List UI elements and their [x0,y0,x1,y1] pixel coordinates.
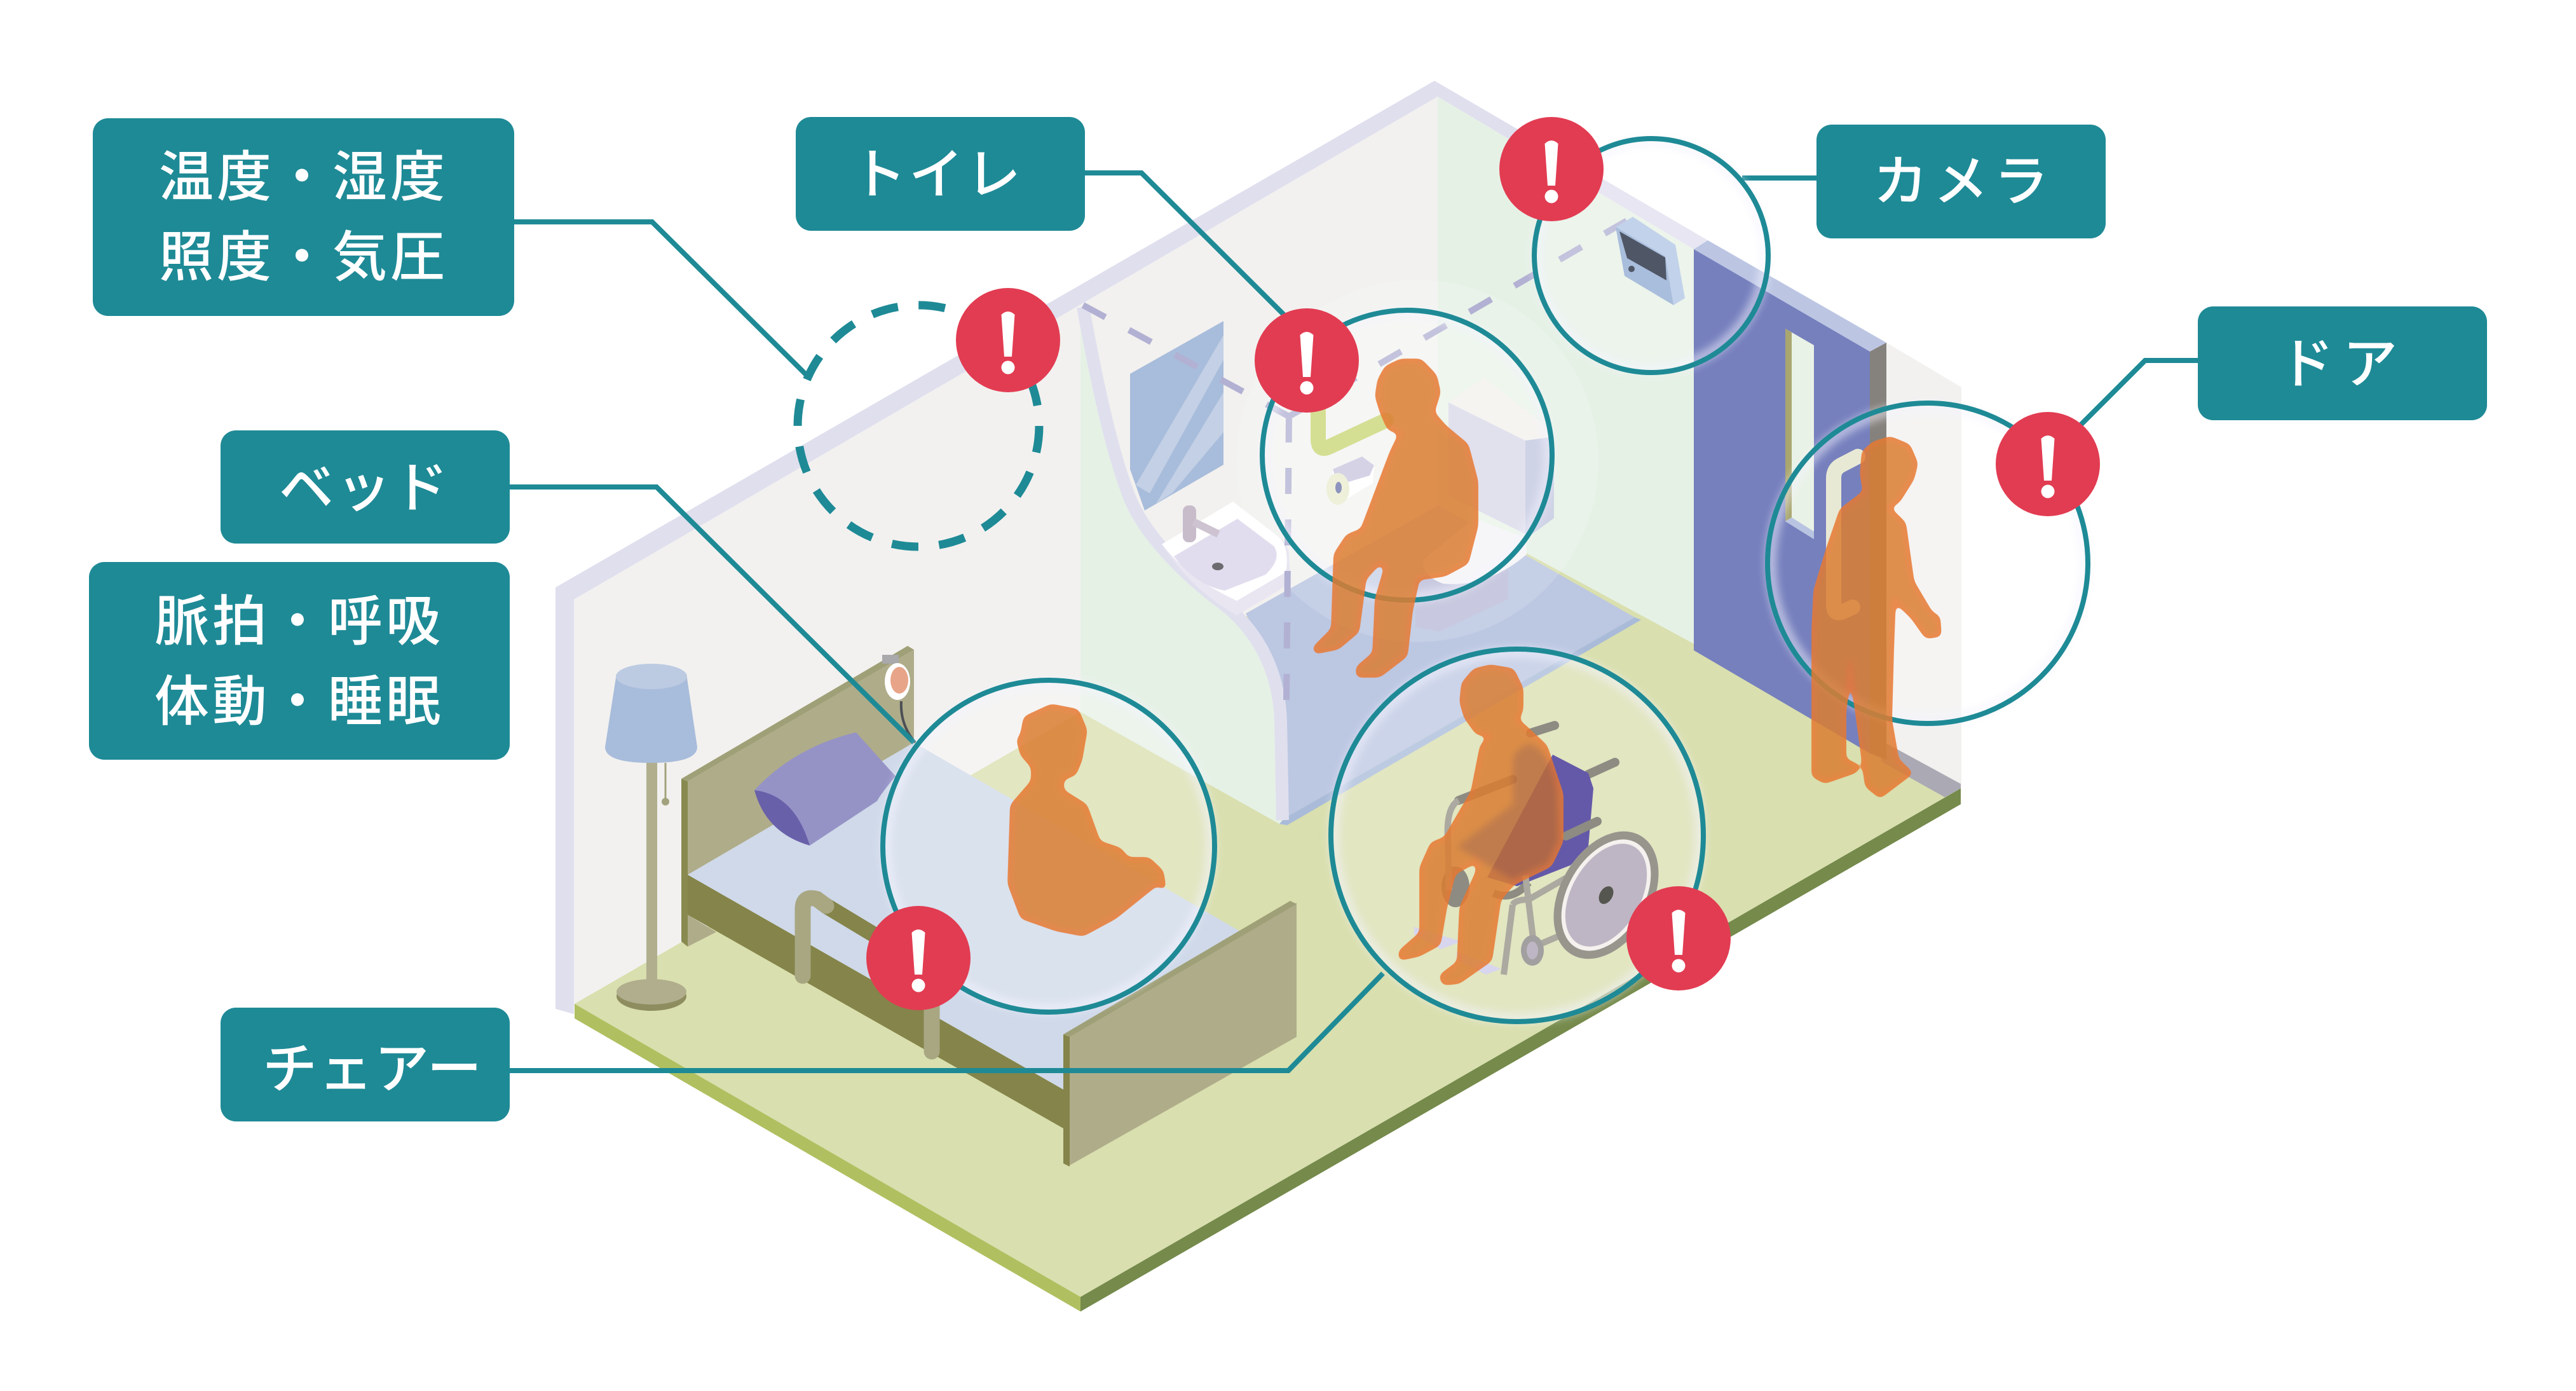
door [1694,240,1886,760]
alert icon: camera [1499,117,1604,221]
label: door: ドア [2279,334,2406,395]
label: chair: チェアー [262,1039,483,1100]
pillow [754,732,896,846]
bed [681,646,1297,1167]
sensor circle: wheelchair [1331,649,1703,1022]
room walls [555,81,1961,1014]
person on toilet [1314,360,1476,676]
sink [1162,502,1290,615]
person on bed [1009,706,1164,935]
label: pulse, breathing, movement, sleep: 脈拍・呼吸 [154,591,444,652]
sensor circle: toilet [1262,310,1552,600]
connector lines [510,173,2198,1071]
footboard [1063,901,1297,1167]
alert icon: chair [1626,886,1731,990]
sensor circle: camera [1534,139,1768,373]
person in wheelchair [1400,666,1562,983]
sensor circle: bed [883,680,1215,1012]
label: temperature, humidity, illuminance, pressure: 温度・湿度 [159,147,448,208]
alert icon: environment [956,288,1060,392]
label: bed: ベッド [279,458,451,519]
mirror [1130,321,1223,510]
person at door [1813,438,1940,797]
toilet [1415,378,1554,631]
label: camera: カメラ [1873,151,2054,212]
curved partition [1080,307,1283,824]
bed sensor [882,655,915,743]
circle lightening fills [883,139,2088,1022]
dashed sensor guide lines [1083,216,1635,702]
sensor circle: environment (dashed) [798,305,1039,547]
toilet paper holder [1326,456,1374,505]
alert icon: toilet [1255,308,1359,413]
label: camera [1816,125,2106,238]
camera device [1616,217,1685,305]
soft glow rims of sensor circles [886,142,2085,1018]
label: bed [221,430,510,544]
label: chair [221,1008,510,1121]
label: toilet [796,117,1085,231]
floor lamp [605,664,697,1011]
faint privacy circle around toilet [1236,280,1598,642]
label: toilet: トイレ [852,144,1023,205]
bathroom floor [1246,505,1641,825]
floor [575,505,1961,1312]
grab bar [1318,410,1386,448]
bed mattress [688,743,1241,1090]
label: temperature, humidity, illuminance, pressure [93,118,514,316]
sensor circle: door [1768,403,2088,723]
bed rail [803,898,932,1052]
wheelchair [1414,725,1680,978]
alert icon: door [1996,412,2100,516]
alert icon: bed [866,906,971,1010]
label: pulse, breathing, movement, sleep: 体動・睡眠 [154,671,444,732]
label: pulse, breathing, movement, sleep [89,562,510,760]
label: temperature, humidity, illuminance, pressure: 照度・気圧 [159,227,448,288]
label: door [2198,306,2487,420]
